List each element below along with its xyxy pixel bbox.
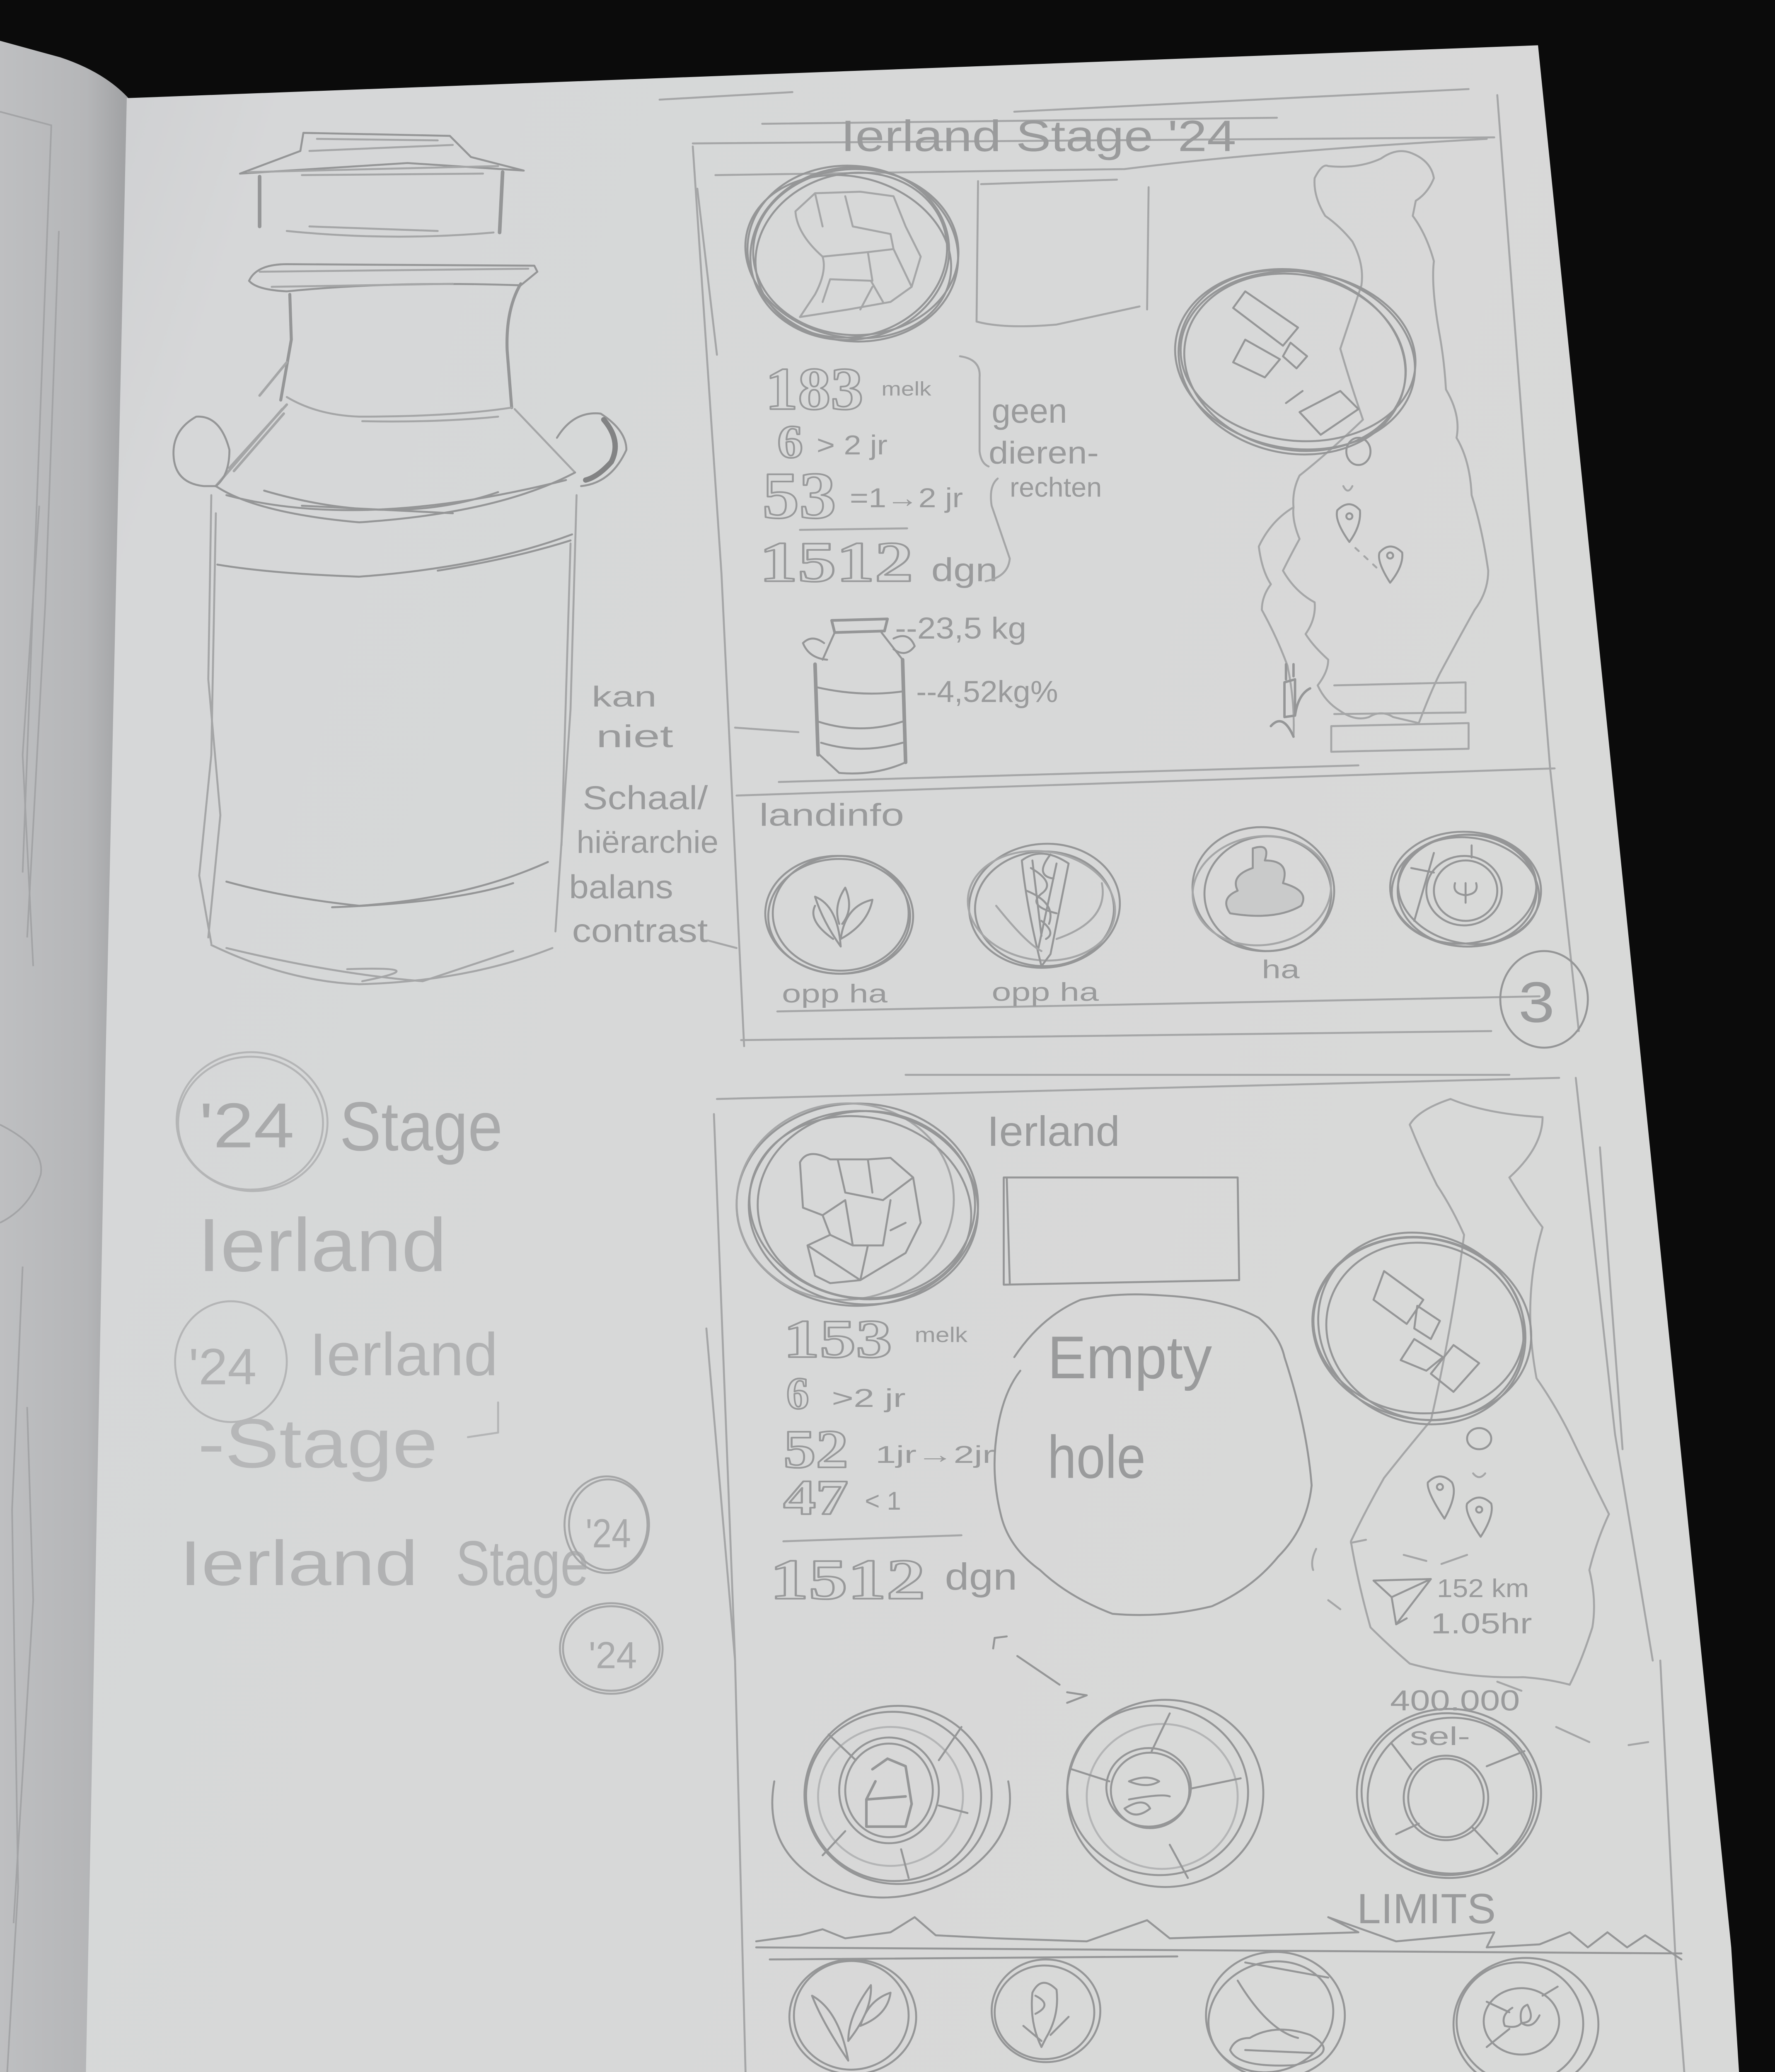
donut chart labels — [1357, 1684, 1520, 1932]
handwritten note: kan niet, schaal, hierarchie: kan — [592, 680, 657, 713]
frame lines — [706, 1075, 1688, 2072]
lettering option 1: Stage — [340, 1087, 503, 1165]
statistics: 47 — [784, 1470, 848, 1525]
milk can labels: --23,5 kg — [895, 612, 1026, 645]
handwritten note: kan niet, schaal, hierarchie: niet — [596, 719, 673, 754]
donut chart: feed — [1054, 1692, 1263, 1889]
icon: cobblestone circle — [728, 152, 970, 359]
statistics — [770, 1309, 1017, 1611]
bracket note: geen dierenrechten: geen — [991, 391, 1067, 430]
statistics: 6 — [786, 1368, 809, 1418]
statistics: 53 — [762, 459, 836, 533]
icon: corn circle — [991, 1959, 1100, 2062]
icon: target leaf circle — [1386, 826, 1548, 955]
paper plane distance note — [1374, 1574, 1532, 1640]
milk can body — [199, 495, 577, 984]
icon labels: opp ha — [991, 978, 1099, 1007]
lettering option 2 — [175, 1301, 498, 1482]
lettering option 2: '24 — [189, 1339, 256, 1396]
empty hole callout: hole — [1047, 1423, 1146, 1491]
icon: corn circle — [961, 838, 1125, 974]
statistics: melk — [881, 378, 931, 400]
lettering option 3: Ierland — [180, 1528, 418, 1599]
title: Ierland Stage '24 — [841, 111, 1236, 160]
lettering option 1 — [172, 1047, 503, 1287]
icon: manure pile circle — [1185, 820, 1340, 958]
statistics: 52 — [784, 1419, 848, 1479]
handwritten note: kan niet, schaal, hierarchie: balans — [569, 868, 673, 905]
icon: leaf circle — [789, 1959, 916, 2072]
paper plane distance note: 1.05hr — [1431, 1607, 1532, 1640]
statistics: >2 jr — [832, 1384, 906, 1413]
icon labels: opp ha — [782, 980, 888, 1008]
statistics: 1512 — [759, 530, 913, 594]
donut chart labels: LIMITS — [1357, 1885, 1496, 1932]
dashed route around the map — [1312, 1540, 1648, 1745]
icon: leaf circle — [762, 852, 916, 978]
statistics: 1512 — [770, 1548, 925, 1611]
icon: target leaf circle — [1447, 1952, 1598, 2072]
lettering option 2: Ierland — [310, 1321, 498, 1388]
lettering option 3: '24 — [585, 1510, 631, 1556]
map pins — [1428, 1428, 1492, 1537]
empty image box — [977, 180, 1149, 326]
statistics — [759, 355, 998, 594]
handwritten note: kan niet, schaal, hierarchie — [569, 680, 737, 949]
paper plane distance note: 152 km — [1437, 1574, 1529, 1603]
mountain divider — [756, 1917, 1681, 1959]
statistics: dgn — [945, 1556, 1017, 1598]
panel: layout sketch 4 — [706, 1075, 1688, 2072]
small milk can chart — [735, 619, 915, 773]
statistics: < 1 — [865, 1487, 901, 1515]
bracket note: geen dierenrechten: rechten — [1010, 472, 1102, 503]
farm locations circle — [1287, 1199, 1557, 1458]
lettering option 2: -Stage — [198, 1404, 438, 1482]
statistics: 6 — [777, 416, 803, 468]
handwritten note: kan niet, schaal, hierarchie: Schaal/ — [583, 779, 708, 816]
donut chart: 400.000 — [1351, 1702, 1548, 1890]
statistics: dgn — [931, 551, 998, 588]
lettering option 1: Ierland — [198, 1203, 447, 1287]
title: Ierland — [987, 1108, 1120, 1155]
map of Ireland outline — [1259, 151, 1488, 737]
lettering experiments — [172, 1047, 663, 1694]
milk can labels: --4,52kg% — [916, 675, 1058, 709]
lettering option 3 — [180, 1477, 663, 1694]
bracket note: geen dierenrechten — [960, 356, 1102, 581]
donut chart labels: sel- — [1410, 1722, 1470, 1751]
bracket note: geen dierenrechten: dieren- — [989, 435, 1099, 470]
panel: layout sketch 3 — [660, 89, 1588, 1048]
farm locations circle — [1159, 247, 1429, 478]
empty hole callout: Empty — [1047, 1324, 1212, 1391]
transport icons and bars — [1271, 664, 1468, 752]
statistics: =1→2 jr — [850, 483, 963, 513]
large milk can sketch — [174, 133, 626, 984]
donut chart labels: 400.000 — [1390, 1684, 1520, 1716]
section label: landinfo: landinfo — [759, 798, 904, 833]
milk can neck — [249, 264, 537, 421]
arrow — [993, 1636, 1087, 1703]
empty hole callout — [994, 1294, 1312, 1615]
lettering option 1: '24 — [199, 1090, 294, 1161]
milk can lid — [240, 133, 524, 237]
lettering option 3: Stage — [456, 1528, 589, 1599]
icon labels: ha — [1262, 956, 1300, 984]
handwritten note: kan niet, schaal, hierarchie: contrast — [572, 912, 708, 949]
donut chart: milk — [772, 1698, 1010, 1898]
milk can shoulders and handles — [174, 362, 626, 522]
statistics: 183 — [765, 355, 863, 422]
icon: cobblestone circle — [727, 1093, 989, 1319]
icon: manure pile circle — [1193, 1944, 1349, 2072]
icon labels — [782, 956, 1300, 1008]
handwritten note: kan niet, schaal, hierarchie: hiërarchie — [577, 825, 718, 860]
lettering option 3: '24 — [589, 1634, 637, 1676]
statistics: melk — [915, 1323, 968, 1347]
statistics: 153 — [784, 1309, 892, 1369]
page number 3 — [1500, 951, 1588, 1048]
empty image box — [1004, 1177, 1239, 1285]
statistics: 1jr→2jr — [875, 1441, 995, 1468]
left book page — [0, 41, 130, 2072]
map of Ireland outline — [1351, 1099, 1609, 1685]
page number 3: 3 — [1519, 971, 1555, 1034]
map pins — [1337, 438, 1403, 583]
milk can labels — [895, 612, 1058, 709]
frame lines — [660, 89, 1579, 1046]
statistics: > 2 jr — [817, 430, 888, 460]
